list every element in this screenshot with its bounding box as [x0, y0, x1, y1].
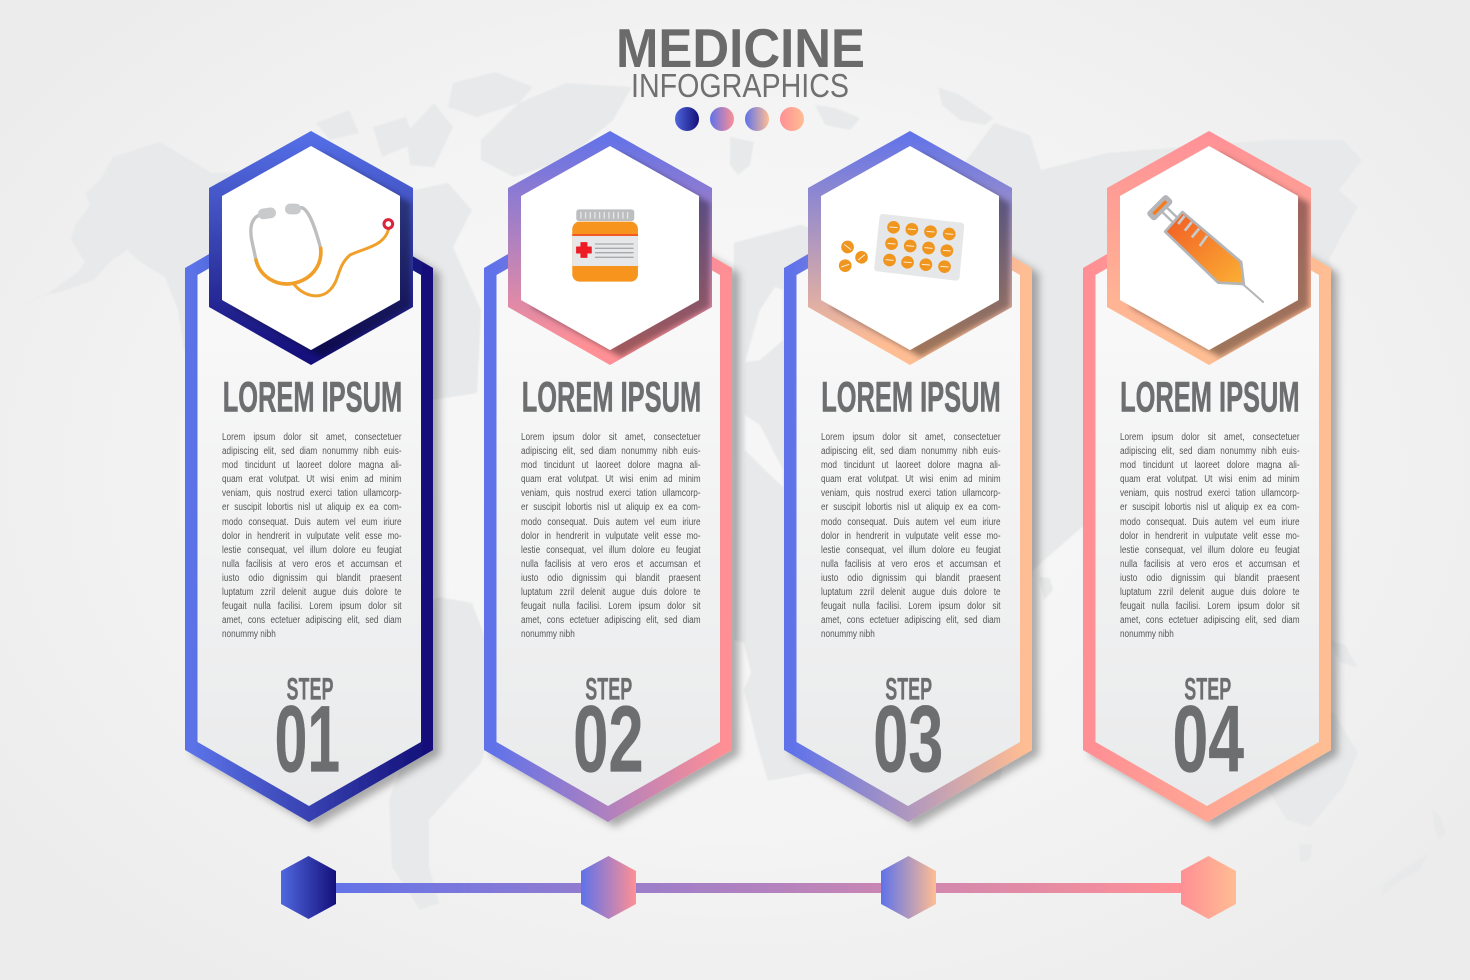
step label: STEP: [286, 670, 334, 706]
body text: lestie consequat, vel illum dolore eu feugiat: [521, 545, 701, 556]
body text: quam erat volutpat. Ut wisi enim ad minim: [821, 474, 1000, 485]
body text: modo consequat. Duis autem vel eum iriure: [222, 517, 401, 528]
body text: Lorem ipsum dolor sit amet, consectetuer: [521, 432, 701, 443]
icon: medicine bottle: [573, 209, 638, 282]
body text: iusto odio dignissim qui blandit praesent: [222, 573, 401, 584]
icon: blister pack of pills: [839, 217, 961, 277]
body text: veniam, quis nostrud exerci tation ullamcorp-: [222, 488, 401, 499]
hexagon badge: [209, 131, 413, 365]
step number: 03: [873, 686, 943, 792]
body text: modo consequat. Duis autem vel eum iriure: [521, 517, 701, 528]
colour dots: [675, 107, 804, 131]
body text: lestie consequat, vel illum dolore eu feugiat: [222, 545, 401, 556]
body text: adipiscing elit, sed diam nonummy nibh euis-: [821, 446, 1000, 457]
heading: MEDICINE: MEDICINE: [616, 17, 865, 79]
body text: lestie consequat, vel illum dolore eu feugiat: [821, 545, 1000, 556]
body text: iusto odio dignissim qui blandit praesent: [521, 573, 701, 584]
body text: Lorem ipsum dolor sit amet, consectetuer: [821, 432, 1000, 443]
body text: adipiscing elit, sed diam nonummy nibh euis-: [521, 446, 701, 457]
body text: mod tincidunt ut laoreet dolore magna ali-: [222, 460, 401, 471]
body text: er suscipit lobortis nisl ut aliquip ex ea com-: [1120, 502, 1300, 513]
body text: modo consequat. Duis autem vel eum iriure: [1120, 517, 1300, 528]
body text: veniam, quis nostrud exerci tation ullamcorp-: [1120, 488, 1300, 499]
body text: adipiscing elit, sed diam nonummy nibh euis-: [1120, 446, 1300, 457]
body text: Lorem ipsum dolor sit amet, consectetuer: [1120, 432, 1300, 443]
body text: iusto odio dignissim qui blandit praesent: [821, 573, 1000, 584]
body text: luptatum zzril delenit augue duis dolore te: [222, 587, 401, 598]
body text: iusto odio dignissim qui blandit praesent: [1120, 573, 1300, 584]
step 01 graphics: [185, 131, 444, 830]
body text: [1120, 432, 1300, 640]
timeline marker 4: [1181, 856, 1236, 919]
body text: adipiscing elit, sed diam nonummy nibh euis-: [222, 446, 401, 457]
step 02 graphics: [484, 131, 744, 830]
panel: step 04: [1083, 131, 1342, 830]
body text: quam erat volutpat. Ut wisi enim ad minim: [222, 474, 401, 485]
panel frame: [1083, 196, 1331, 822]
body text: [821, 432, 1000, 640]
body text: dolor in hendrerit in vulputate velit esse mo-: [1120, 531, 1300, 542]
body text: amet, cons ectetuer adipiscing elit, sed diam: [222, 615, 401, 626]
body text: dolor in hendrerit in vulputate velit esse mo-: [521, 531, 701, 542]
body text: dolor in hendrerit in vulputate velit esse mo-: [222, 531, 401, 542]
panel frame: [784, 196, 1032, 822]
body text: nonummy nibh: [1120, 629, 1174, 640]
hexagon badge: [508, 131, 712, 365]
body text: feugait nulla facilisi. Lorem ipsum dolor sit: [1120, 601, 1300, 612]
panel: step 03: [784, 131, 1044, 830]
step number: 01: [275, 686, 340, 792]
step 04 graphics: [1083, 131, 1342, 830]
body text: [222, 432, 402, 640]
body text: nonummy nibh: [821, 629, 874, 640]
body text: nulla facilisis at vero eros et accumsan et: [1120, 559, 1300, 570]
panel: step 02: [484, 131, 744, 830]
body text: Lorem ipsum dolor sit amet, consectetuer: [222, 432, 401, 443]
connector line: [336, 883, 1181, 893]
timeline marker 1: [281, 856, 336, 919]
body text: er suscipit lobortis nisl ut aliquip ex ea com-: [521, 502, 701, 513]
body text: feugait nulla facilisi. Lorem ipsum dolor sit: [521, 601, 701, 612]
panel frame: [484, 196, 732, 822]
step number: 02: [573, 686, 644, 792]
body text: nonummy nibh: [521, 629, 575, 640]
body text: [521, 432, 701, 640]
step label: STEP: [586, 670, 633, 706]
step label: STEP: [885, 670, 932, 706]
body text: amet, cons ectetuer adipiscing elit, sed diam: [821, 615, 1000, 626]
body text: mod tincidunt ut laoreet dolore magna ali-: [821, 460, 1000, 471]
body text: nonummy nibh: [222, 629, 276, 640]
panel: step 01: [185, 131, 444, 830]
body text: luptatum zzril delenit augue duis dolore te: [521, 587, 701, 598]
timeline marker 3: [881, 856, 936, 919]
panel frame: [185, 196, 433, 822]
step number: 04: [1173, 686, 1244, 792]
step 03 graphics: [784, 131, 1044, 830]
icon: syringe: [1146, 194, 1263, 302]
body text: mod tincidunt ut laoreet dolore magna ali-: [521, 460, 701, 471]
subheading: INFOGRAPHICS: INFOGRAPHICS: [631, 67, 849, 104]
step label: STEP: [1184, 670, 1231, 706]
body text: veniam, quis nostrud exerci tation ullamcorp-: [521, 488, 701, 499]
title: [616, 17, 865, 131]
body text: quam erat volutpat. Ut wisi enim ad minim: [1120, 474, 1300, 485]
body text: feugait nulla facilisi. Lorem ipsum dolor sit: [821, 601, 1000, 612]
timeline: [281, 856, 1236, 919]
body text: feugait nulla facilisi. Lorem ipsum dolor sit: [222, 601, 401, 612]
hexagon badge: [1107, 131, 1311, 365]
body text: er suscipit lobortis nisl ut aliquip ex ea com-: [821, 502, 1000, 513]
hexagon badge: [808, 131, 1012, 365]
body text: luptatum zzril delenit augue duis dolore te: [1120, 587, 1300, 598]
body text: nulla facilisis at vero eros et accumsan et: [521, 559, 701, 570]
body text: lestie consequat, vel illum dolore eu feugiat: [1120, 545, 1300, 556]
body text: modo consequat. Duis autem vel eum iriure: [821, 517, 1000, 528]
body text: nulla facilisis at vero eros et accumsan et: [222, 559, 401, 570]
body text: luptatum zzril delenit augue duis dolore te: [821, 587, 1000, 598]
body text: amet, cons ectetuer adipiscing elit, sed diam: [1120, 615, 1300, 626]
body text: amet, cons ectetuer adipiscing elit, sed diam: [521, 615, 701, 626]
body text: er suscipit lobortis nisl ut aliquip ex ea com-: [222, 502, 401, 513]
body text: veniam, quis nostrud exerci tation ullamcorp-: [821, 488, 1000, 499]
body text: mod tincidunt ut laoreet dolore magna ali-: [1120, 460, 1300, 471]
icon: stethoscope: [251, 204, 393, 296]
timeline marker 2: [581, 856, 636, 919]
body text: dolor in hendrerit in vulputate velit esse mo-: [821, 531, 1000, 542]
body text: nulla facilisis at vero eros et accumsan et: [821, 559, 1000, 570]
body text: quam erat volutpat. Ut wisi enim ad minim: [521, 474, 701, 485]
